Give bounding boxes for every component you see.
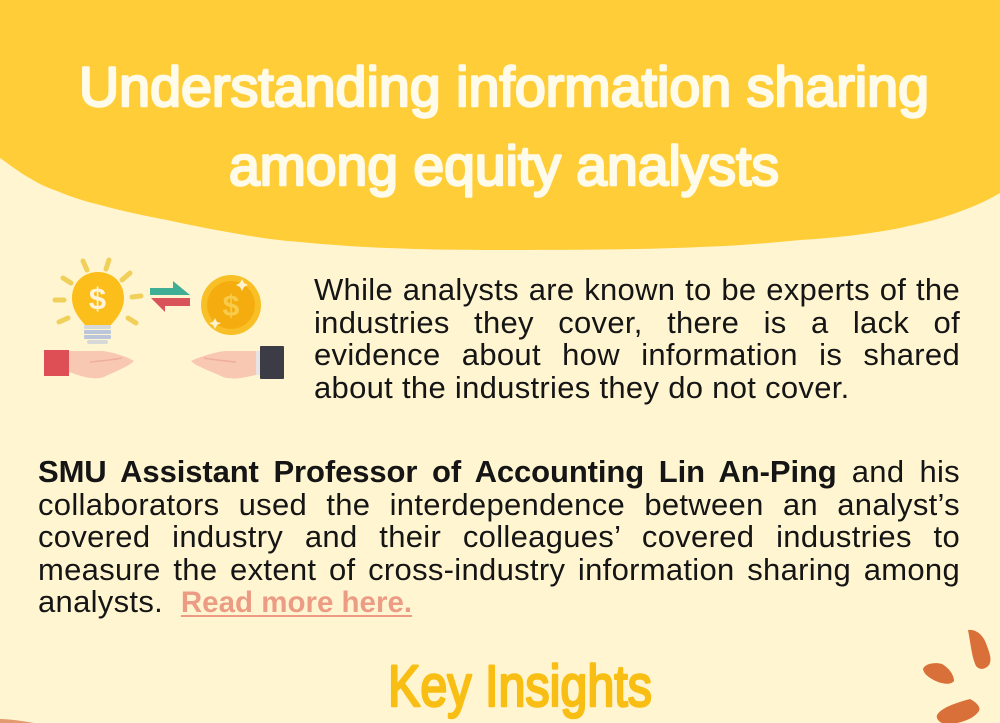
icon: gold coin: $	[223, 290, 240, 323]
title: Understanding information sharing	[79, 55, 929, 118]
text block: research description: collaborators used the interdependence between an analyst’s	[38, 487, 960, 522]
icon: light bulb with dollar sign: $	[89, 281, 106, 316]
text block: intro: about the industries they do not cover.	[314, 370, 850, 405]
text block: intro: industries they cover, there is a lack of	[314, 305, 960, 340]
text block: research description: SMU Assistant Professor of Accounting Lin An-Ping and his	[38, 454, 960, 489]
text block: research description: measure the extent of cross-industry information sharing among	[38, 552, 960, 587]
text block: intro: evidence about how information is shared	[314, 337, 960, 372]
icon: gold coin	[201, 275, 261, 335]
text block: research description: analysts. Read more here.	[38, 584, 412, 619]
icon: exchange arrows	[150, 281, 190, 312]
text block: intro: While analysts are known to be experts of the	[314, 272, 960, 307]
text block: intro	[314, 272, 960, 405]
text block: research description	[38, 454, 960, 619]
icon: right hand	[191, 346, 284, 379]
heading: key insights: Key Insights	[388, 654, 652, 719]
icon: light bulb with dollar sign	[55, 260, 141, 344]
title: among equity analysts	[229, 134, 779, 197]
icon: left hand	[44, 350, 134, 378]
text block: research description: covered industry and their colleagues’ covered industries to	[38, 519, 960, 554]
